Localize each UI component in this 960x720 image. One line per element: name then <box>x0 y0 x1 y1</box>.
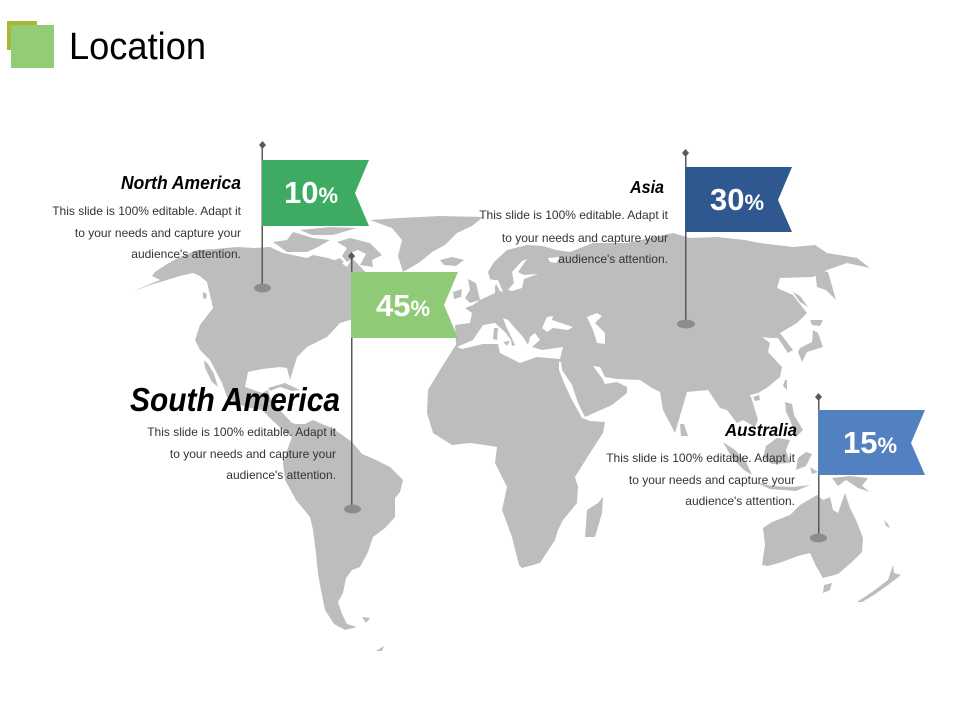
Baltic Sea <box>508 259 538 291</box>
Cuba <box>268 383 300 391</box>
Skagerrak <box>490 280 503 292</box>
New Zealand <box>857 565 901 602</box>
label: Asia: Asia <box>629 177 664 197</box>
Sri Lanka <box>680 424 688 436</box>
label: Australia <box>606 420 797 508</box>
Mediterranean islands <box>493 328 510 346</box>
Greenland <box>370 216 483 272</box>
label: South America: audience's attention. <box>226 468 336 482</box>
UK and Ireland <box>453 279 480 303</box>
flag: Australia 15% <box>818 410 925 475</box>
Iceland <box>440 257 464 266</box>
Black Sea <box>542 316 573 332</box>
Madagascar <box>585 497 603 537</box>
label: Australia: This slide is 100% editable. Adapt it <box>606 451 796 465</box>
label: South America: This slide is 100% editable. Adapt it <box>147 425 337 439</box>
pin: Asia <box>677 149 695 328</box>
label: South America <box>130 381 340 482</box>
label: North America <box>52 173 242 261</box>
label: North America: North America <box>121 173 241 193</box>
world map <box>132 216 901 651</box>
label: Australia: audience's attention. <box>685 494 795 508</box>
pin: Australia <box>810 393 827 542</box>
Mediterranean Sea <box>457 318 563 363</box>
South America <box>283 420 403 630</box>
North and Central America <box>132 247 375 437</box>
flag: South America 45%: 45% <box>376 288 430 323</box>
White Sea <box>548 257 560 263</box>
Eurasia <box>455 233 870 433</box>
flag: North America 10%: 10% <box>284 175 338 210</box>
label: North America: to your needs and capture your <box>75 226 241 240</box>
Hainan and Taiwan <box>753 380 787 401</box>
label: North America: audience's attention. <box>131 247 241 261</box>
pin: South America <box>344 252 361 514</box>
label: Asia: audience's attention. <box>558 252 668 266</box>
Caspian Sea <box>587 313 605 344</box>
Indonesia and Philippines <box>723 442 752 475</box>
label: North America: This slide is 100% editable. Adapt it <box>52 204 242 218</box>
flag: South America 45% <box>351 272 458 338</box>
New Guinea <box>832 476 870 492</box>
flag: Asia 30% <box>685 167 792 232</box>
Tierra del Fuego and islands <box>362 617 384 651</box>
pin: North America <box>254 141 271 292</box>
label: Australia: to your needs and capture your <box>629 473 795 487</box>
label: Asia: This slide is 100% editable. Adapt it <box>479 208 669 222</box>
label: South America: to your needs and capture your <box>170 447 336 461</box>
label: Australia: Australia <box>724 420 797 440</box>
label: Asia: to your needs and capture your <box>502 231 668 245</box>
Baja California <box>204 360 218 387</box>
Arctic islands <box>273 232 330 252</box>
flag: Australia 15%: 15% <box>843 425 897 460</box>
label: Asia <box>479 177 669 266</box>
Tasmania <box>823 583 832 593</box>
Australia <box>762 493 863 578</box>
title: Location <box>69 26 206 68</box>
Africa <box>427 340 605 568</box>
Sakhalin and Japan <box>793 292 808 307</box>
Vancouver Island <box>203 292 207 299</box>
label: South America: South America <box>130 381 340 418</box>
title icon: overlapping green squares <box>7 21 54 68</box>
seas <box>457 257 605 363</box>
flag: North America 10% <box>262 160 369 226</box>
Kamchatka <box>815 270 836 300</box>
flag: Asia 30%: 30% <box>710 182 764 217</box>
